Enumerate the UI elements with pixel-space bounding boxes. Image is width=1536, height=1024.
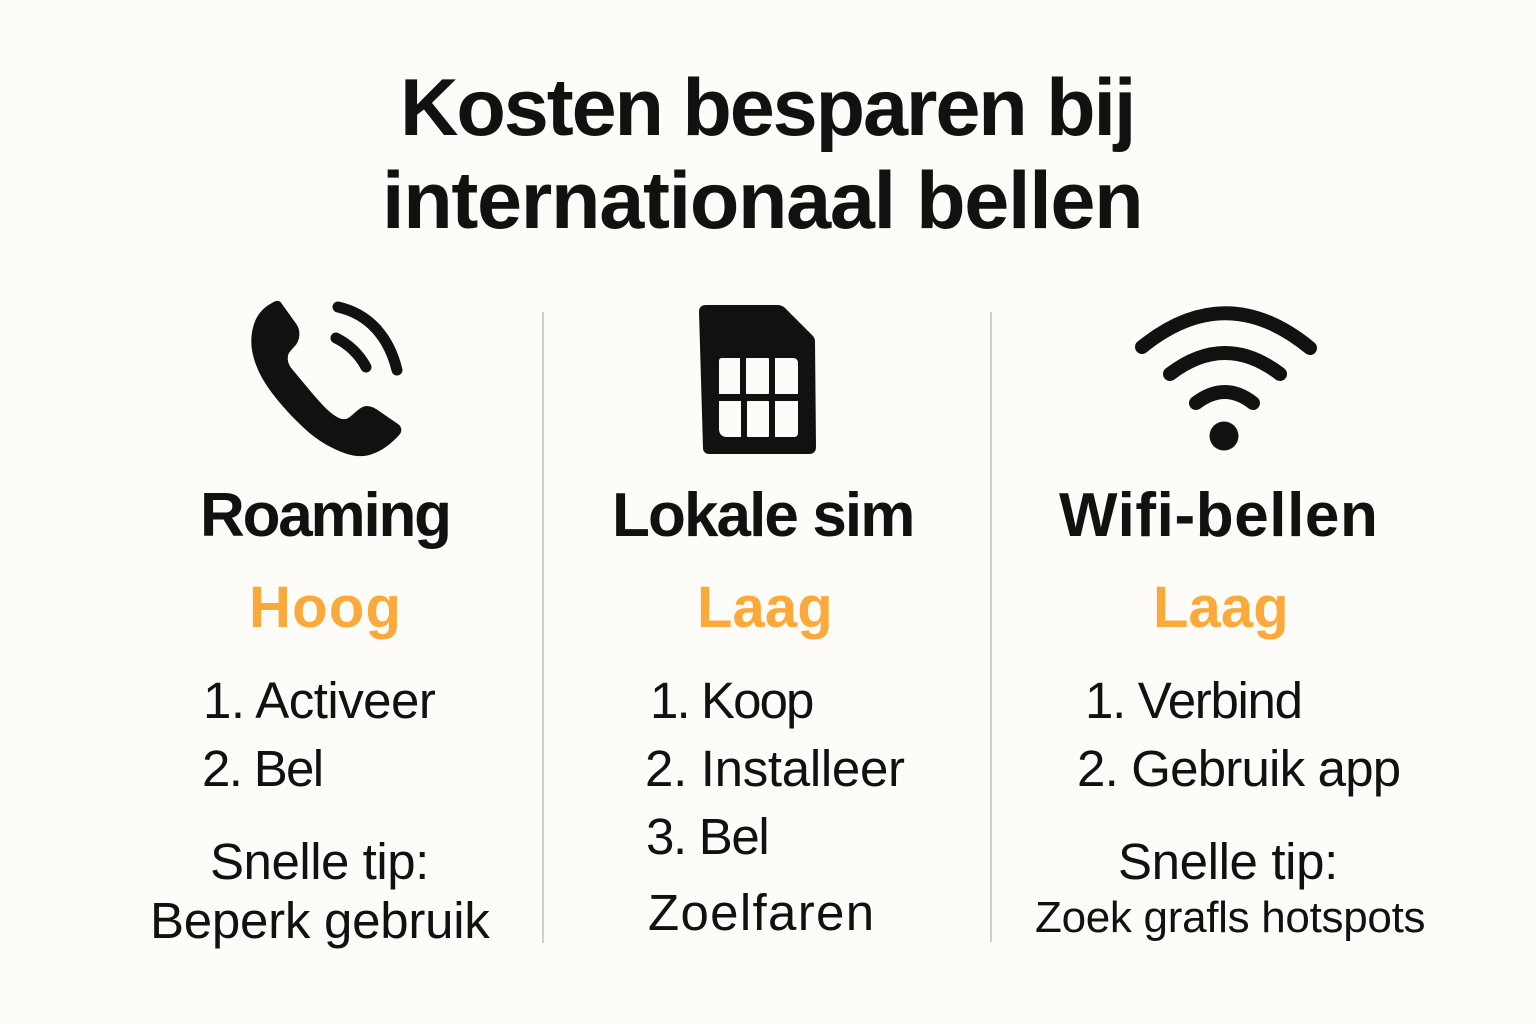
icon: wifi <box>1135 306 1317 450</box>
icon: sim card <box>699 305 816 454</box>
title: Kosten besparen bij <box>400 63 1134 153</box>
panel: roaming <box>150 300 490 949</box>
steps: 2. Installeer <box>645 740 905 797</box>
icon: phone <box>251 300 402 456</box>
cost: Laag: Laag <box>1153 575 1289 640</box>
steps <box>1077 672 1400 797</box>
steps <box>202 672 435 797</box>
quick tip: Zoelfaren <box>648 884 875 941</box>
steps: 2. Gebruik app <box>1077 740 1400 797</box>
steps <box>645 672 905 865</box>
quick tip: Snelle tip: <box>210 833 429 890</box>
steps: 3. Bel <box>646 808 768 865</box>
steps: 1. Koop <box>650 672 813 729</box>
panel: wifi-bellen <box>1035 306 1425 942</box>
title: internationaal bellen <box>382 156 1142 246</box>
title <box>382 63 1142 246</box>
panel: lokale sim <box>612 305 913 941</box>
quick tip <box>1035 833 1425 942</box>
heading: Wifi-bellen: Wifi-bellen <box>1059 481 1378 550</box>
quick tip: Snelle tip: <box>1118 833 1338 890</box>
cost: Laag: Laag <box>697 575 833 640</box>
heading: Lokale sim: Lokale sim <box>612 481 913 550</box>
quick tip: Beperk gebruik <box>150 892 490 949</box>
cost: Hoog: Hoog <box>249 575 402 640</box>
steps: 1. Activeer <box>203 672 435 729</box>
steps: 1. Verbind <box>1085 672 1302 729</box>
heading: Roaming: Roaming <box>200 481 450 550</box>
quick tip <box>150 833 490 949</box>
quick tip: Zoek grafls hotspots <box>1035 893 1425 942</box>
steps: 2. Bel <box>202 740 322 797</box>
